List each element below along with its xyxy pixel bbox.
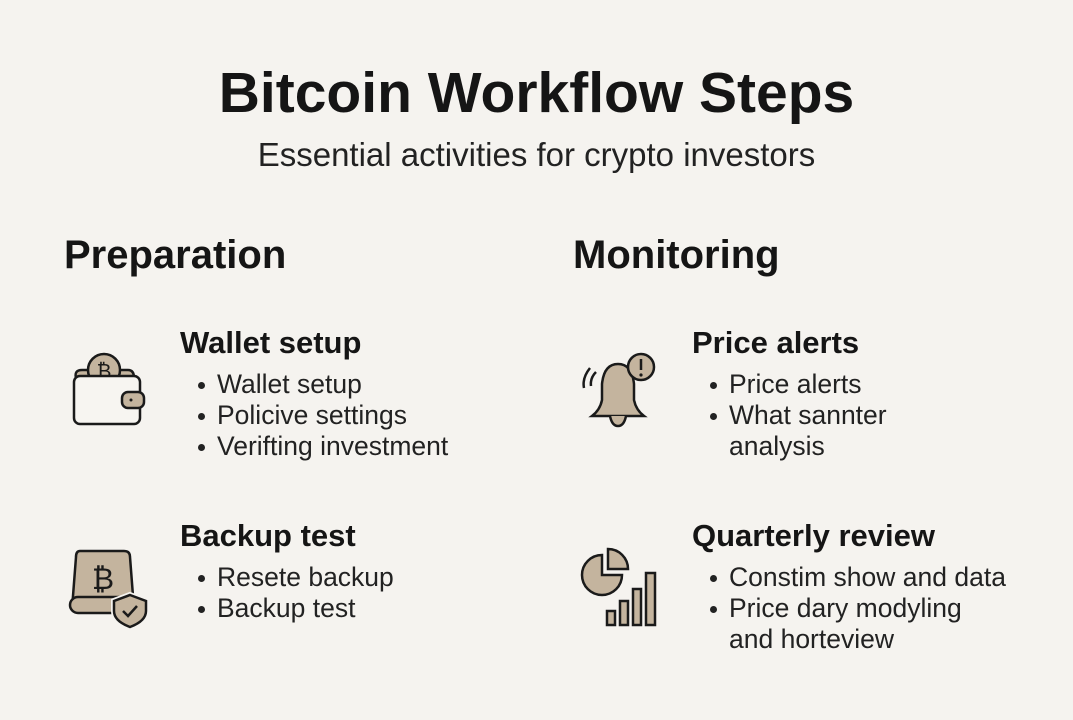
item: Wallet setup [180, 325, 448, 461]
item: Backup test [180, 518, 394, 623]
heading: Preparation: Preparation [64, 233, 286, 277]
icon: bell with alert [582, 352, 656, 428]
item: Price alerts: Price alerts [729, 369, 862, 399]
item: Quarterly review: and horteview [729, 624, 894, 654]
icon: bitcoin vault with shield [68, 550, 148, 628]
item: Quarterly review: Constim show and data [729, 562, 1006, 592]
item: Wallet setup: Verifting investment [217, 431, 448, 461]
item: Quarterly review: Quarterly review [692, 518, 935, 553]
subtitle: Essential activities for crypto investors [258, 136, 815, 173]
item: Price alerts: What sannter [729, 400, 887, 430]
item: Price alerts [692, 325, 887, 461]
icon: wallet with bitcoin: ₿ [97, 361, 111, 383]
title: Bitcoin Workflow Steps [219, 61, 854, 125]
item: Wallet setup: Policive settings [217, 400, 407, 430]
item: Quarterly review: Price dary modyling [729, 593, 962, 623]
item: Backup test: Backup test [180, 518, 356, 553]
item: Backup test: Backup test [217, 593, 355, 623]
item: Backup test: Resete backup [217, 562, 394, 592]
item: Price alerts: analysis [729, 431, 825, 461]
item: Wallet setup: Wallet setup [217, 369, 362, 399]
icon: pie and bar chart [580, 548, 656, 626]
icon: bitcoin vault with shield: ₿ [92, 563, 114, 596]
icon: wallet with bitcoin [72, 352, 146, 426]
heading: Monitoring: Monitoring [573, 233, 780, 277]
item: Wallet setup: Wallet setup [180, 325, 361, 360]
item: Price alerts: Price alerts [692, 325, 859, 360]
item: Quarterly review [692, 518, 1006, 654]
